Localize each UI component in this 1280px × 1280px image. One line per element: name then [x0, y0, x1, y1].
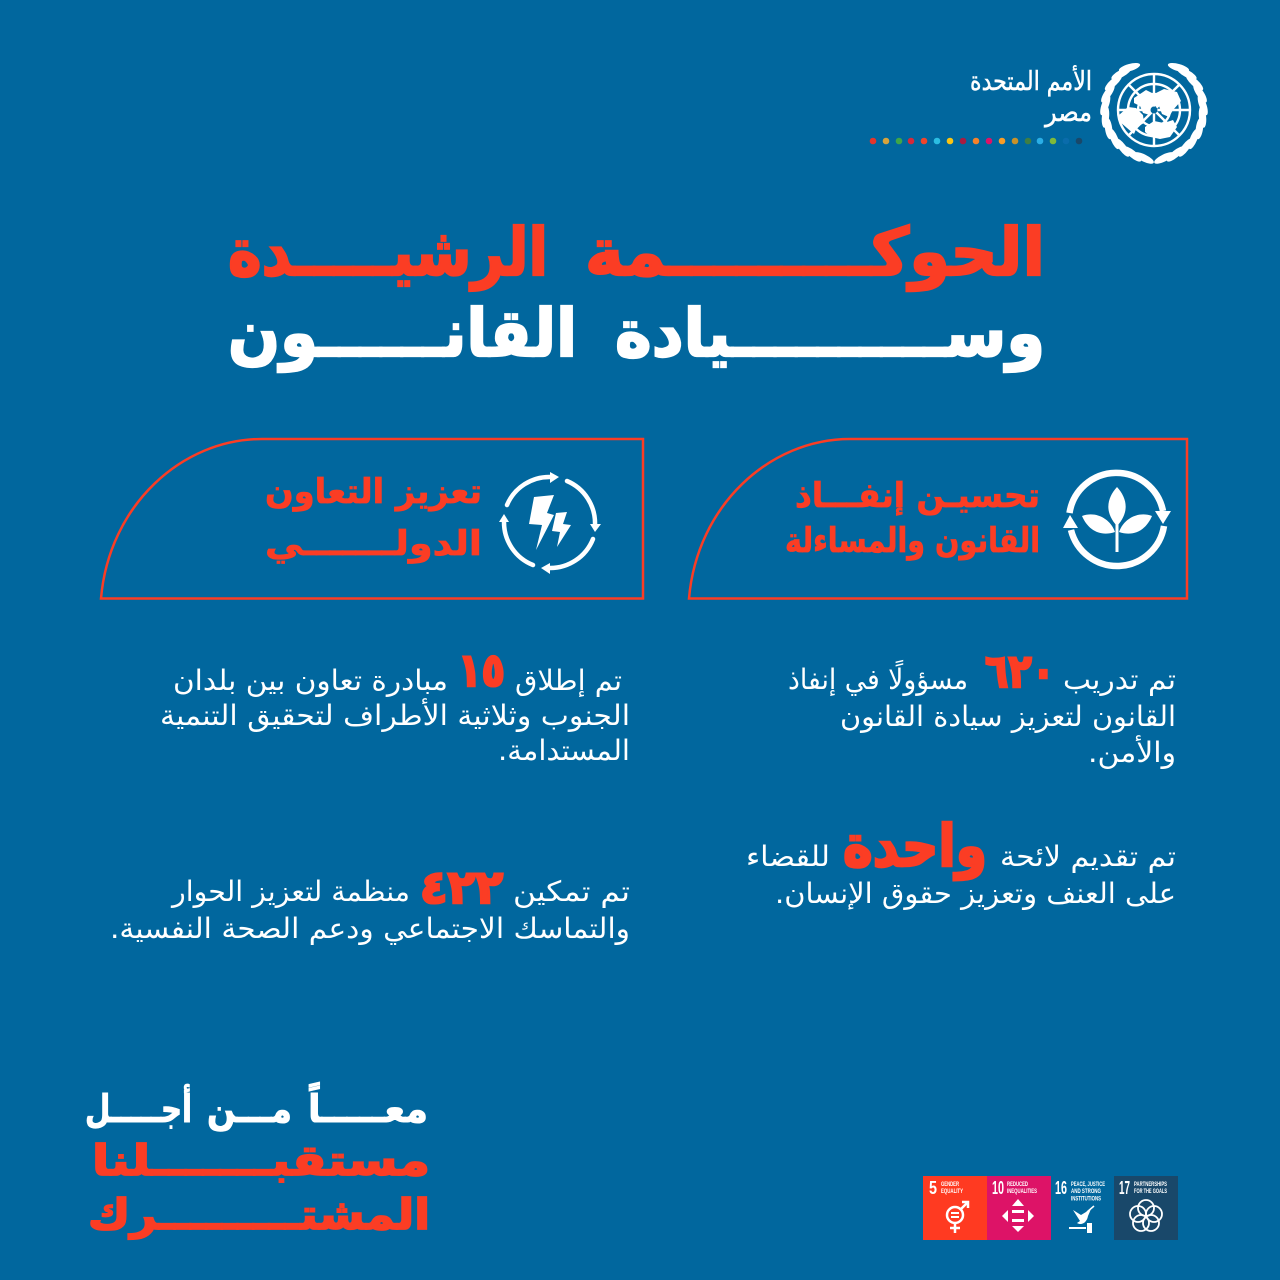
title [228, 214, 1045, 373]
panel outline [101, 439, 643, 598]
text block: one regulation for the judiciary: تم تقديم لائحة [1000, 840, 1176, 873]
text block: 422 organizations [110, 860, 630, 945]
SDG 5 gender equality [923, 1176, 987, 1240]
panel heading [785, 476, 1040, 561]
panel heading: القانون والمساءلة [785, 521, 1040, 561]
text block: 15 cooperation initiatives: تم إطلاق [515, 664, 622, 697]
text block: 15 cooperation initiatives: مبادرة تعاون بين بلدان [173, 664, 448, 697]
UN emblem [1098, 61, 1210, 166]
text block: one regulation for the judiciary: على العنف وتعزيز حقوق الإنسان. [775, 877, 1176, 910]
text block: 422 organizations: تم تمكين [513, 875, 630, 908]
SDG 10 reduced inequalities: INEQUALITIES [1007, 1188, 1037, 1195]
logo text: United Nations Egypt: الأمم المتحدة [970, 64, 1092, 97]
SDG 17 partnerships: PARTNERSHIPS [1134, 1181, 1167, 1188]
text block: 15 cooperation initiatives: الجنوب وثلاثية الأطراف لتحقيق التنمية [160, 697, 630, 732]
SDG 10 reduced inequalities [987, 1176, 1051, 1240]
text block: 620 officers trained: والأمن. [1088, 734, 1176, 769]
panel heading: الدولـــــــي [265, 524, 482, 564]
text block: 620 officers trained: مسؤولًا في إنفاذ [788, 659, 968, 696]
closing slogan [85, 1082, 430, 1240]
logo text: United Nations Egypt [970, 64, 1092, 128]
panel: strengthening international cooperation [101, 439, 643, 598]
SDG 16 peace and justice: AND STRONG [1071, 1188, 1101, 1195]
text block: 620 officers trained: تم تدريب [1063, 663, 1176, 696]
number: 422: ٤٢٢ [420, 860, 503, 914]
logo text: United Nations Egypt: مصر [1043, 98, 1092, 128]
number: 15: ١٥ [458, 643, 505, 697]
panel heading [265, 472, 482, 564]
icon: plant in cycle arrows [1063, 473, 1171, 566]
SDG 17 partnerships [1114, 1176, 1178, 1240]
panel heading: تحسيـن إنفـــاذ [795, 476, 1040, 516]
text block: 15 cooperation initiatives [160, 643, 630, 767]
number: 620: ٦٢٠ [985, 644, 1055, 698]
SDG 17 partnerships: 17 [1119, 1178, 1130, 1198]
SDG 5 gender equality: EQUALITY [941, 1188, 963, 1195]
text block: 422 organizations: والتماسك الاجتماعي ودعم الصحة النفسية. [110, 912, 630, 945]
title: وســــــــــيادة [615, 295, 1045, 373]
SDG 10 reduced inequalities: 10 [992, 1178, 1004, 1198]
closing slogan: مـــن [207, 1087, 292, 1131]
title: الرشيـــــدة [228, 214, 548, 291]
closing slogan: أجـــــل [85, 1084, 192, 1131]
SDG 10 reduced inequalities: REDUCED [1007, 1181, 1028, 1188]
SDG goal badges [923, 1176, 1178, 1240]
SDG 5 gender equality: 5 [929, 1178, 937, 1198]
title: القانــــــون [228, 295, 577, 373]
SDG 16 peace and justice: 16 [1055, 1178, 1067, 1198]
SDG 16 peace and justice [1055, 1178, 1105, 1233]
panel heading: تعزيز التعاون [265, 472, 482, 512]
SDG 16 peace and justice: INSTITUTIONS [1071, 1196, 1101, 1202]
closing slogan: المشتـــــــــرك [88, 1190, 430, 1240]
SDG 5 gender equality: GENDER [941, 1181, 959, 1188]
closing slogan: مستقبـــــــلنا [92, 1136, 430, 1185]
text block: 422 organizations: منظمة لتعزيز الحوار [170, 875, 410, 908]
text block: 620 officers trained [788, 644, 1176, 769]
highlighted word: one: واحدة [843, 812, 987, 881]
text block: 15 cooperation initiatives: المستدامة. [498, 734, 630, 767]
SDG colour dots [870, 138, 1082, 144]
SDG 17 partnerships: FOR THE GOALS [1134, 1188, 1167, 1195]
text block: 620 officers trained: القانون لتعزيز سيادة القانون [840, 700, 1176, 733]
panel outline [689, 439, 1187, 598]
panel: improving law enforcement [689, 439, 1187, 598]
title: الحوكـــــــــمة [585, 214, 1045, 292]
closing slogan: معـــــاً [308, 1082, 428, 1131]
icon: lightning bolts in cycle arrows [499, 472, 601, 574]
UN Egypt logo header [870, 61, 1210, 166]
SDG 16 peace and justice: PEACE, JUSTICE [1071, 1181, 1105, 1188]
text block: one regulation for the judiciary: للقضاء [746, 840, 830, 873]
text block: one regulation for the judiciary [746, 812, 1176, 910]
